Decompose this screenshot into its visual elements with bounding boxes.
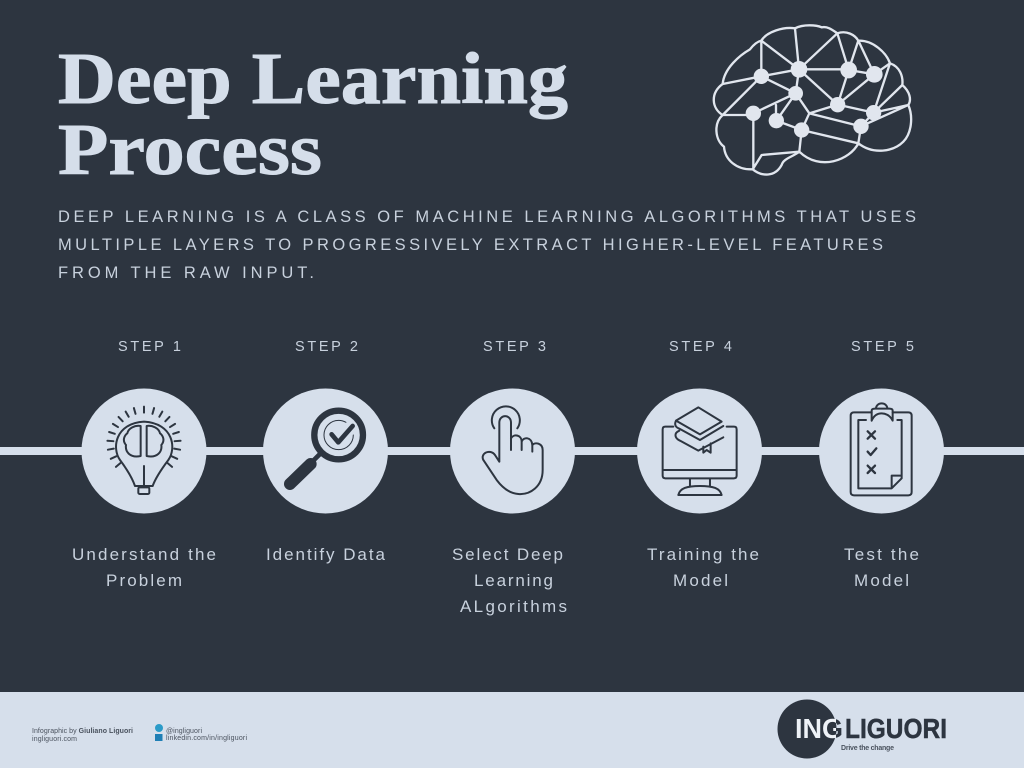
step 4: STEP 4 <box>669 339 732 355</box>
logo: ING <box>795 713 843 744</box>
step 3: Select Deep <box>452 545 563 564</box>
step 2: STEP 2 <box>295 339 358 355</box>
icon: monitor with books <box>663 407 737 495</box>
step 4: Training the <box>647 545 759 564</box>
step 1: Understand the <box>72 545 216 564</box>
step 4: Model <box>673 571 728 590</box>
description: FROM THE RAW INPUT. <box>58 264 314 282</box>
title <box>58 38 568 190</box>
step 5: Test the <box>844 545 919 564</box>
icon: brain network <box>714 25 911 175</box>
logo: Drive the change <box>841 745 894 752</box>
icon: magnifying glass with check <box>290 411 363 484</box>
step 5 <box>819 339 944 590</box>
footer credit: ingliguori.com <box>32 736 77 743</box>
step 3: Learning <box>474 571 553 590</box>
step 5: STEP 5 <box>851 339 914 355</box>
step 4 <box>637 339 762 590</box>
step 1 <box>72 339 216 590</box>
footer credit: Infographic by Giuliano Liguori <box>32 728 133 735</box>
logo <box>778 700 947 758</box>
step 3 <box>450 339 575 616</box>
social links: @ingliguori <box>166 728 202 735</box>
step 2 <box>263 339 388 564</box>
footer band <box>0 692 1024 768</box>
description: DEEP LEARNING IS A CLASS OF MACHINE LEARNING ALGORITHMS THAT USES <box>58 208 916 226</box>
description: MULTIPLE LAYERS TO PROGRESSIVELY EXTRACT HIGHER-LEVEL FEATURES <box>58 236 883 254</box>
step 1: Problem <box>106 571 182 590</box>
step 1: STEP 1 <box>118 339 181 355</box>
icon: linkedin <box>155 734 162 741</box>
logo: LIGUORI <box>845 713 947 744</box>
step 2: Identify Data <box>266 545 386 564</box>
icon: clipboard checklist <box>851 403 912 495</box>
title: Deep Learning <box>58 38 568 119</box>
title: Process <box>58 109 322 190</box>
icon: twitter <box>155 724 163 732</box>
description <box>58 208 916 282</box>
timeline line <box>0 447 1024 455</box>
footer credit <box>32 728 133 743</box>
step 5: Model <box>854 571 909 590</box>
step 3: STEP 3 <box>483 339 546 355</box>
social links <box>166 728 247 742</box>
social links: linkedin.com/in/ingliguori <box>166 735 247 742</box>
step 3: ALgorithms <box>460 597 567 616</box>
icon: light bulb with brain <box>107 407 181 494</box>
icon: pointing hand <box>483 406 543 494</box>
